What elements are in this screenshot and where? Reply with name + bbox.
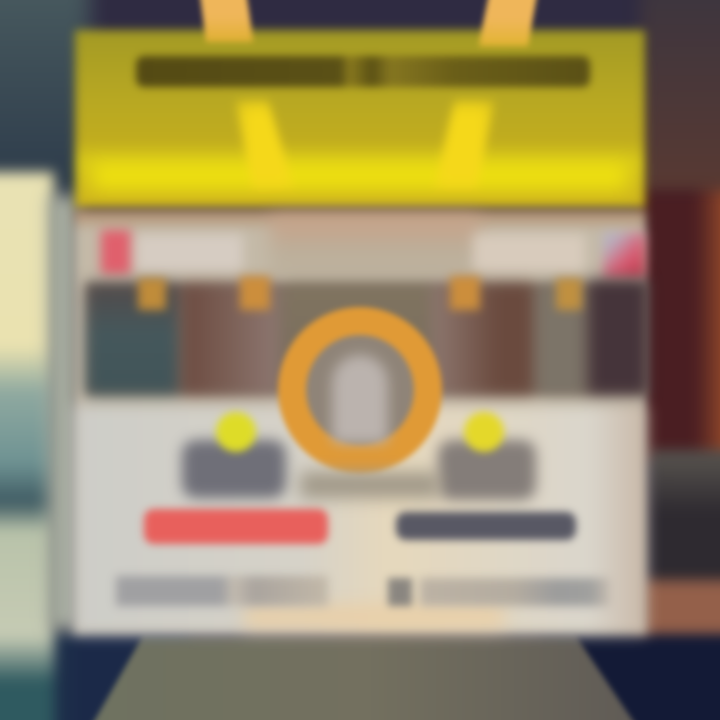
icon: right yellow dot bbox=[464, 412, 504, 452]
icon: orange tab 1 bbox=[138, 278, 166, 310]
column 5 bbox=[538, 283, 588, 395]
icon: left yellow dot bbox=[216, 412, 256, 452]
left column strip bbox=[0, 172, 54, 720]
right card icon block bbox=[438, 440, 536, 500]
background: right wall bbox=[640, 0, 720, 200]
right header label bbox=[473, 234, 585, 272]
title bar, text illegible in the reference bbox=[136, 56, 590, 87]
column 6 bbox=[588, 279, 648, 395]
left red badge bbox=[101, 230, 131, 274]
header row bbox=[94, 205, 652, 283]
background: left wall bbox=[0, 0, 90, 200]
column 4 bbox=[432, 283, 534, 395]
centre link block bbox=[300, 472, 440, 498]
background: top wall bbox=[0, 0, 720, 60]
panel: main white board bbox=[74, 210, 646, 634]
column 2 bbox=[182, 283, 280, 395]
background: right red wall bbox=[640, 190, 720, 460]
left inner strap bbox=[234, 96, 287, 186]
right caption icon bbox=[388, 578, 412, 606]
warm bottom glow bbox=[244, 605, 504, 629]
right red badge bbox=[603, 232, 645, 278]
lower board area bbox=[74, 405, 646, 634]
background: bottom left floor bbox=[0, 630, 190, 720]
centre gauge ring bbox=[274, 304, 446, 476]
left caption text, illegible in the reference bbox=[116, 576, 328, 606]
left strip edge bbox=[48, 195, 78, 630]
right inner strap bbox=[433, 100, 495, 190]
dark label pill bbox=[396, 512, 576, 540]
icon: orange tab 2 bbox=[240, 276, 270, 310]
background: centre floor bbox=[80, 636, 650, 720]
background: bottom right floor bbox=[540, 635, 720, 720]
dark column band bbox=[86, 283, 648, 395]
right caption text, illegible in the reference bbox=[420, 578, 610, 606]
column 1 bbox=[86, 283, 180, 395]
background: right floor edge bbox=[640, 580, 720, 640]
ring centre figure bbox=[332, 355, 388, 443]
left hanging strap bbox=[194, 0, 254, 43]
icon: orange tab 4 bbox=[556, 278, 582, 310]
left card icon block bbox=[182, 440, 286, 498]
centre header label bbox=[270, 216, 480, 276]
bright lower band bbox=[93, 162, 627, 190]
red label pill bbox=[144, 509, 328, 544]
column 3 bbox=[284, 283, 434, 395]
panel: yellow header bbox=[75, 30, 645, 208]
ring fill bbox=[278, 307, 442, 473]
right hanging strap bbox=[478, 0, 542, 47]
left header label bbox=[135, 234, 243, 272]
background: right lower wall bbox=[650, 450, 720, 590]
icon: orange tab 3 bbox=[450, 276, 480, 310]
